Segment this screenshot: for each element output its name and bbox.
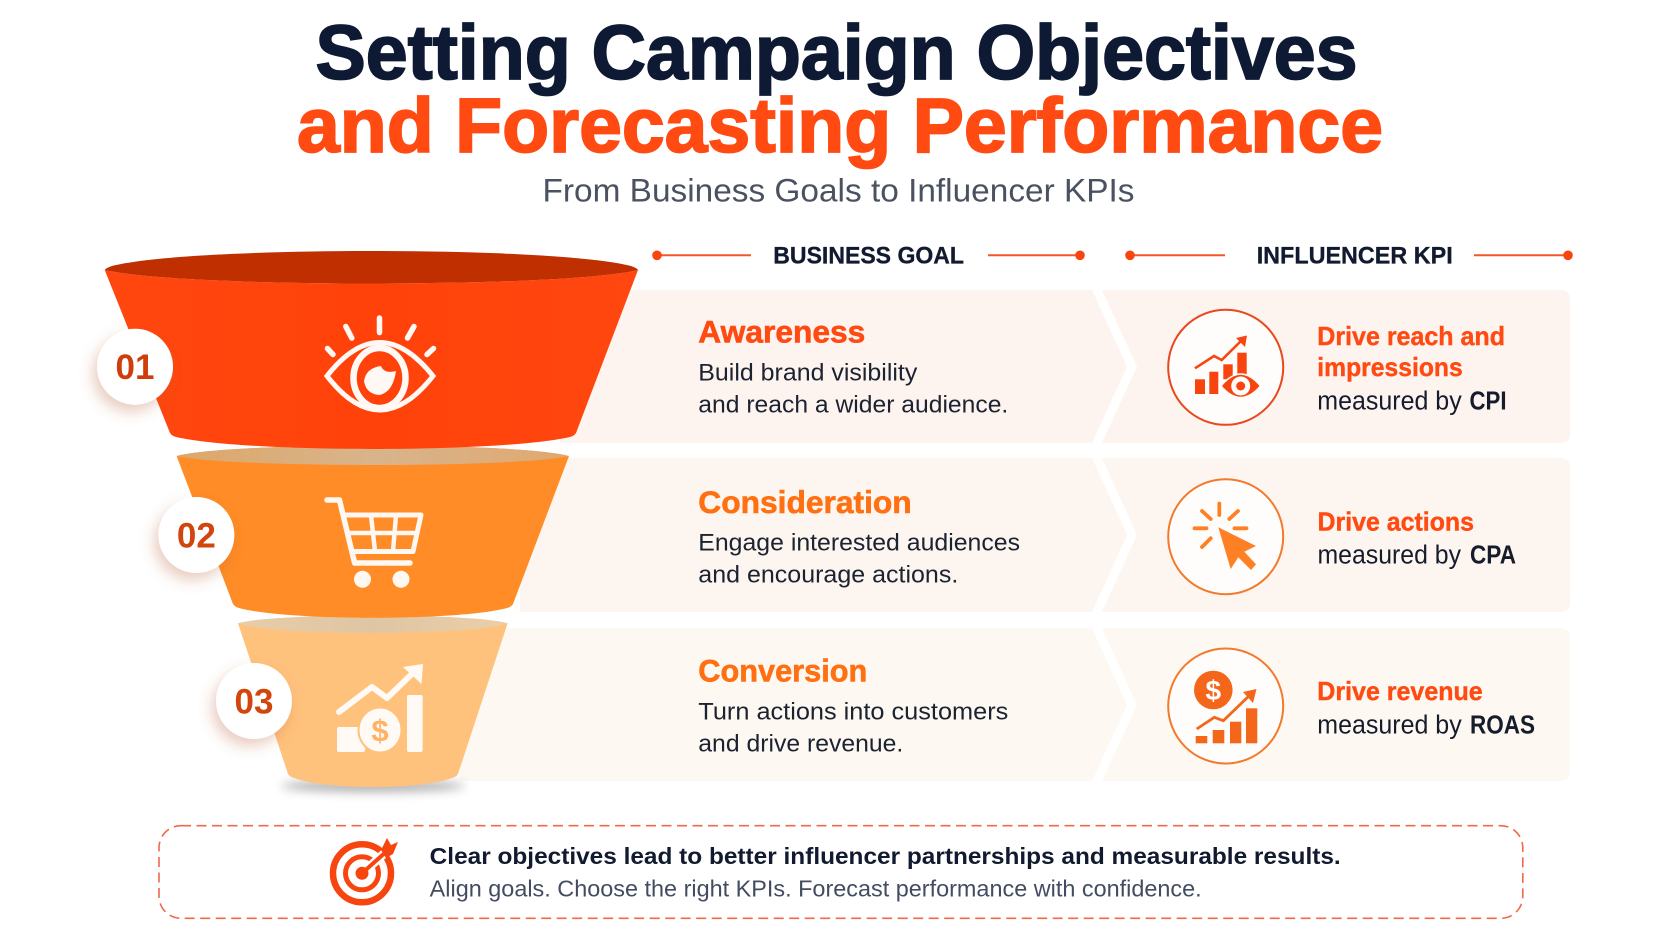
panel: conversion KPI <box>1102 628 1570 781</box>
badge 03: 03 <box>235 682 273 722</box>
funnel tier 2 <box>177 446 569 618</box>
heading: awareness: Awareness <box>698 314 865 350</box>
text: conversion KPI <box>1317 676 1535 739</box>
column header: business goal <box>652 242 1085 269</box>
funnel tier 1 <box>105 251 638 449</box>
text: consideration KPI: CPA <box>1470 541 1516 569</box>
text: conversion description <box>698 698 1008 758</box>
text: consideration KPI <box>1318 507 1516 569</box>
badge 02: 02 <box>177 516 216 556</box>
icon: reach chart with eye <box>1168 310 1283 425</box>
title <box>297 10 1383 169</box>
funnel tier 3 <box>238 616 508 787</box>
text: awareness KPI: Drive reach and <box>1317 321 1505 351</box>
row 1: awareness <box>560 290 1570 443</box>
text: consideration description: Engage interested audiences <box>698 530 1020 557</box>
icon: clicking cursor <box>1168 479 1283 594</box>
icon: eye <box>327 318 434 410</box>
text: awareness KPI <box>1317 321 1506 415</box>
funnel shadow <box>281 780 465 792</box>
panel: conversion goal <box>460 628 1127 781</box>
column header: influencer KPI: INFLUENCER KPI <box>1257 242 1453 269</box>
icon: revenue growth chart: $ <box>371 713 389 748</box>
text: conversion KPI: Drive revenue <box>1317 676 1483 706</box>
row 3: conversion <box>460 628 1570 781</box>
heading: consideration: Consideration <box>698 484 912 520</box>
badge 01 <box>97 329 173 405</box>
funnel <box>105 251 638 792</box>
title line 2: and Forecasting Performance <box>297 83 1383 169</box>
callout subtext: Align goals. Choose the right KPIs. Forecast performance with confidence. <box>430 876 1202 902</box>
icon: revenue growth chart <box>337 664 423 752</box>
text: awareness KPI: CPI <box>1470 387 1506 415</box>
panel: awareness KPI <box>1102 290 1570 443</box>
row 2: consideration <box>520 458 1570 612</box>
text: awareness description <box>698 360 1008 419</box>
text: consideration description: and encourage actions. <box>698 562 958 589</box>
subtitle: From Business Goals to Influencer KPIs <box>542 172 1134 208</box>
badge 01: 01 <box>116 348 154 387</box>
text: conversion KPI: ROAS <box>1470 711 1535 739</box>
callout <box>159 826 1523 918</box>
badge 03 <box>216 663 292 739</box>
text: consideration description <box>698 530 1020 589</box>
icon: revenue coin and chart: $ <box>1206 675 1222 706</box>
text: awareness description: Build brand visibility <box>698 360 918 387</box>
heading: conversion: Conversion <box>698 653 867 689</box>
text: consideration KPI: measured by <box>1318 541 1461 569</box>
column header: business goal: BUSINESS GOAL <box>773 242 964 269</box>
text: conversion KPI: measured by <box>1317 711 1462 739</box>
icon: shopping cart <box>327 500 421 588</box>
text: awareness KPI: impressions <box>1317 352 1463 382</box>
text: consideration KPI: Drive actions <box>1318 507 1474 537</box>
panel: awareness goal <box>560 290 1127 443</box>
text: conversion description: and drive revenue. <box>698 731 903 758</box>
panel: consideration goal <box>520 458 1127 612</box>
column header: influencer KPI <box>1125 242 1573 269</box>
badge 02 <box>158 497 234 573</box>
text: awareness description: and reach a wider audience. <box>698 392 1008 419</box>
callout heading: Clear objectives lead to better influencer partnerships and measurable results. <box>430 843 1341 869</box>
panel: consideration KPI <box>1102 458 1570 612</box>
icon: target with arrow <box>333 838 398 902</box>
title line 1: Setting Campaign Objectives <box>316 10 1358 96</box>
icon: revenue coin and chart <box>1168 648 1283 764</box>
text: awareness KPI: measured by <box>1317 387 1462 415</box>
text: conversion description: Turn actions into customers <box>698 698 1008 725</box>
